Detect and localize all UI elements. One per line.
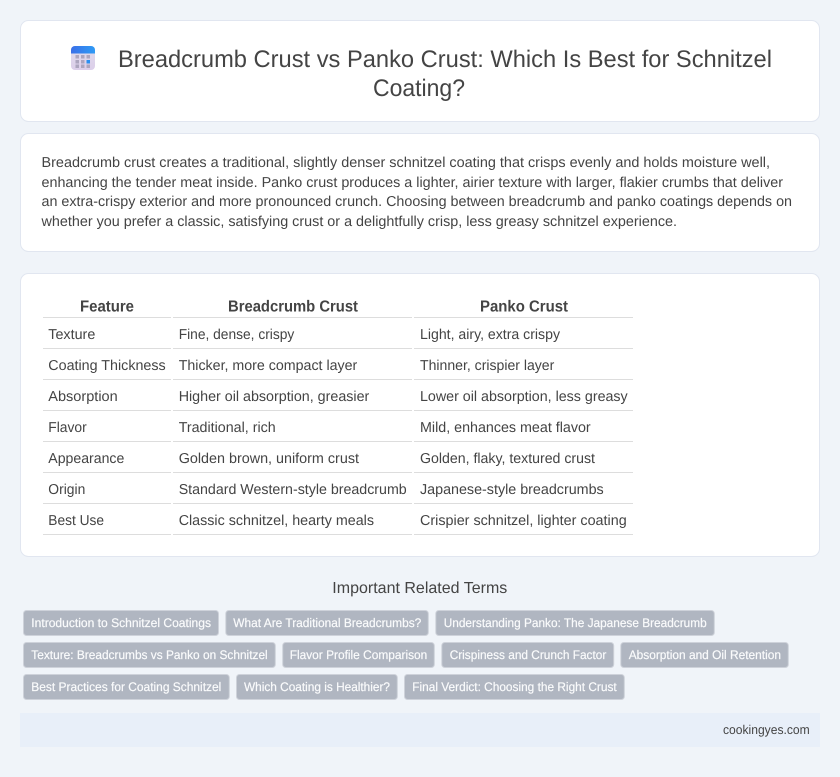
tag: What Are Traditional Breadcrumbs? bbox=[233, 616, 421, 630]
tag: Texture: Breadcrumbs vs Panko on Schnitzel bbox=[31, 648, 268, 662]
row: best use: Classic schnitzel, hearty meals bbox=[179, 513, 374, 529]
row: appearance bbox=[48, 451, 595, 467]
row: coating thickness: Coating Thickness bbox=[48, 358, 166, 374]
row: absorption: Higher oil absorption, greasier bbox=[179, 389, 369, 405]
tag: Understanding Panko: The Japanese Breadcrumb bbox=[444, 616, 707, 630]
icon: calendar bbox=[71, 46, 95, 70]
table header: Feature bbox=[80, 298, 134, 316]
text block: introduction: an extra-crispy exterior and more pronounced crunch. Choosing between breadcrumb and panko coatings depends on bbox=[42, 194, 792, 210]
tag: Which Coating is Healthier? bbox=[244, 680, 390, 694]
row: best use: Crispier schnitzel, lighter coating bbox=[420, 513, 627, 529]
row: coating thickness: Thicker, more compact layer bbox=[179, 358, 357, 374]
row: flavor: Traditional, rich bbox=[179, 420, 276, 436]
tag bbox=[404, 674, 624, 700]
tag bbox=[24, 642, 275, 668]
tag bbox=[442, 642, 614, 668]
heading: important related terms: Important Related Terms bbox=[332, 580, 507, 597]
tag: Absorption and Oil Retention bbox=[629, 648, 781, 662]
row: flavor: Mild, enhances meat flavor bbox=[420, 420, 591, 436]
tag bbox=[436, 610, 714, 636]
text block: introduction: enhancing the tender meat inside. Panko crust produces a lighter, airier texture with larger, flakier crumbs that deliver bbox=[42, 175, 783, 191]
tag: Flavor Profile Comparison bbox=[290, 648, 427, 662]
tag: Final Verdict: Choosing the Right Crust bbox=[412, 680, 617, 694]
row: texture: Texture bbox=[48, 327, 95, 343]
tag bbox=[621, 642, 788, 668]
row: absorption: Lower oil absorption, less greasy bbox=[420, 389, 628, 405]
text block: introduction: whether you prefer a classic, satisfying crust or a delightfully crisp, less greasy schnitzel experience. bbox=[41, 214, 677, 230]
row: absorption bbox=[48, 389, 628, 405]
tag: Introduction to Schnitzel Coatings bbox=[31, 616, 211, 630]
row: origin: Japanese-style breadcrumbs bbox=[420, 482, 604, 498]
table header: Breadcrumb Crust bbox=[228, 298, 359, 316]
row: flavor: Flavor bbox=[48, 420, 87, 436]
row: appearance: Golden, flaky, textured crust bbox=[420, 451, 595, 467]
table header bbox=[80, 298, 569, 316]
row: coating thickness: Thinner, crispier layer bbox=[420, 358, 555, 374]
table header: Panko Crust bbox=[480, 298, 569, 316]
heading bbox=[118, 46, 772, 102]
row: appearance: Golden brown, uniform crust bbox=[179, 451, 359, 467]
tag: Crispiness and Crunch Factor bbox=[450, 648, 606, 662]
text block: introduction: Breadcrumb crust creates a traditional, slightly denser schnitzel coating that crisps evenly and holds moisture well, bbox=[42, 155, 770, 171]
tag bbox=[236, 674, 397, 700]
heading: Breadcrumb Crust vs Panko Crust: Which Is Best for Schnitzel bbox=[118, 46, 772, 73]
row: appearance: Appearance bbox=[48, 451, 124, 467]
tag bbox=[24, 674, 229, 700]
tag bbox=[283, 642, 434, 668]
row: best use bbox=[48, 513, 627, 529]
row: origin: Origin bbox=[48, 482, 85, 498]
panel: title bbox=[20, 20, 820, 122]
row: best use: Best Use bbox=[48, 513, 104, 529]
row: origin bbox=[48, 482, 604, 498]
text block: introduction bbox=[41, 155, 792, 230]
row: flavor bbox=[48, 420, 591, 436]
panel: related term tags bbox=[24, 610, 788, 700]
heading: Coating? bbox=[373, 75, 465, 102]
row: texture: Fine, dense, crispy bbox=[179, 327, 295, 343]
row: texture: Light, airy, extra crispy bbox=[420, 327, 561, 343]
row: texture bbox=[48, 327, 561, 343]
panel: comparison table bbox=[20, 274, 820, 556]
tag: Best Practices for Coating Schnitzel bbox=[31, 680, 221, 694]
tag bbox=[24, 610, 218, 636]
row: coating thickness bbox=[48, 358, 555, 374]
footer: cookingyes.com bbox=[723, 722, 810, 737]
row: origin: Standard Western-style breadcrumb bbox=[179, 482, 407, 498]
row: absorption: Absorption bbox=[48, 389, 118, 405]
tag bbox=[226, 610, 428, 636]
panel: introduction bbox=[20, 134, 820, 252]
footer bbox=[20, 713, 820, 747]
